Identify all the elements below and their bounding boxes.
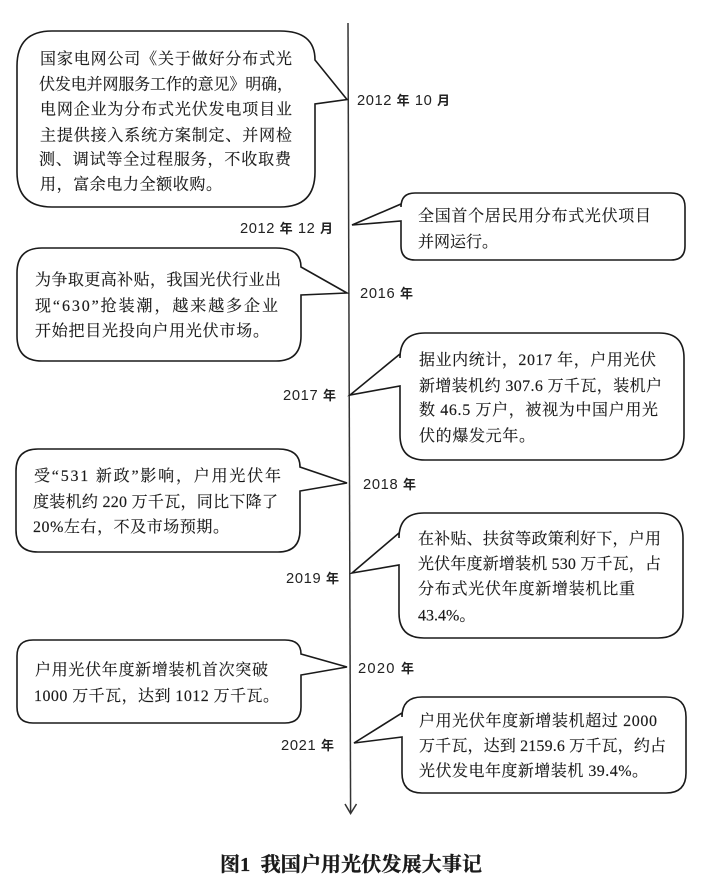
- figure caption: 图1 我国户用光伏发展大事记: [220, 853, 482, 876]
- callout: 2017年: 数 46.5 万户，被视为中国户用光: [419, 401, 658, 419]
- callout: 2017年: 伏的爆发元年。: [419, 426, 535, 445]
- callout: 2016年: 为争取更高补贴，我国光伏行业出: [35, 270, 281, 289]
- callout: 2012年12月: 全国首个居民用分布式光伏项目: [418, 207, 651, 225]
- callout: 2019年: 分布式光伏年度新增装机比重: [418, 579, 635, 598]
- callout: 2012年10月: [17, 31, 347, 207]
- callout: 2016年: [17, 248, 347, 361]
- callout: 2019年: 光伏年度新增装机 530 万千瓦，占: [418, 554, 661, 573]
- callout: 2012年12月: [352, 193, 685, 260]
- callout: 2018年: 度装机约 220 万千瓦，同比下降了: [33, 493, 278, 511]
- date label: 2020年: 2020 年: [358, 661, 414, 677]
- callout: 2012年12月: 并网运行。: [418, 233, 498, 251]
- callout: 2018年: [16, 449, 347, 552]
- callout: 2018年: 受“531 新政”影响，户用光伏年: [34, 466, 281, 485]
- date label: 2012年12月: 2012 年 12 月: [240, 221, 333, 237]
- arrow: vertical timeline axis: [345, 23, 356, 814]
- callout: 2017年: [350, 333, 684, 460]
- callout: 2020年: [17, 640, 347, 723]
- callout: 2016年: 现“630”抢装潮，越来越多企业: [35, 297, 278, 315]
- callout: 2019年: 在补贴、扶贫等政策利好下，户用: [418, 530, 661, 548]
- date label: 2017年: 2017 年: [283, 388, 336, 404]
- callout: 2017年: 据业内统计，2017 年，户用光伏: [419, 350, 656, 369]
- callout: 2021年: [354, 697, 686, 793]
- callout: 2012年10月: 测、调试等全过程服务，不收取费: [39, 150, 292, 168]
- callout: 2020年: 户用光伏年度新增装机首次突破: [35, 660, 268, 679]
- date label: 2016年: 2016 年: [360, 286, 413, 302]
- callout: 2016年: 开始把目光投向户用光伏市场。: [35, 322, 269, 340]
- date label: 2019年: 2019 年: [286, 571, 339, 587]
- callout: 2021年: 万千瓦，达到 2159.6 万千瓦，约占: [419, 737, 666, 755]
- date label: 2018年: 2018 年: [363, 477, 416, 493]
- callout: 2021年: 户用光伏年度新增装机超过 2000: [419, 711, 657, 730]
- callout: 2012年10月: 用，富余电力全额收购。: [40, 174, 222, 194]
- callout: 2020年: 1000 万千瓦，达到 1012 万千瓦。: [34, 687, 279, 705]
- callout: 2012年10月: 国家电网公司《关于做好分布式光: [40, 50, 292, 68]
- callout: 2012年10月: 伏发电并网服务工作的意见》明确，: [39, 76, 293, 94]
- callout: 2019年: 43.4%。: [418, 608, 475, 624]
- callout: 2018年: 20%左右，不及市场预期。: [33, 518, 229, 536]
- callout: 2019年: [352, 513, 683, 638]
- date label: 2021年: 2021 年: [281, 738, 334, 754]
- callout: 2021年: 光伏发电年度新增装机 39.4%。: [419, 761, 648, 780]
- callout: 2017年: 新增装机约 307.6 万千瓦，装机户: [419, 377, 662, 395]
- callout: 2012年10月: 主提供接入系统方案制定、并网检: [40, 126, 292, 144]
- callout: 2012年10月: 电网企业为分布式光伏发电项目业: [40, 100, 292, 118]
- date label: 2012年10月: 2012 年 10 月: [357, 93, 450, 109]
